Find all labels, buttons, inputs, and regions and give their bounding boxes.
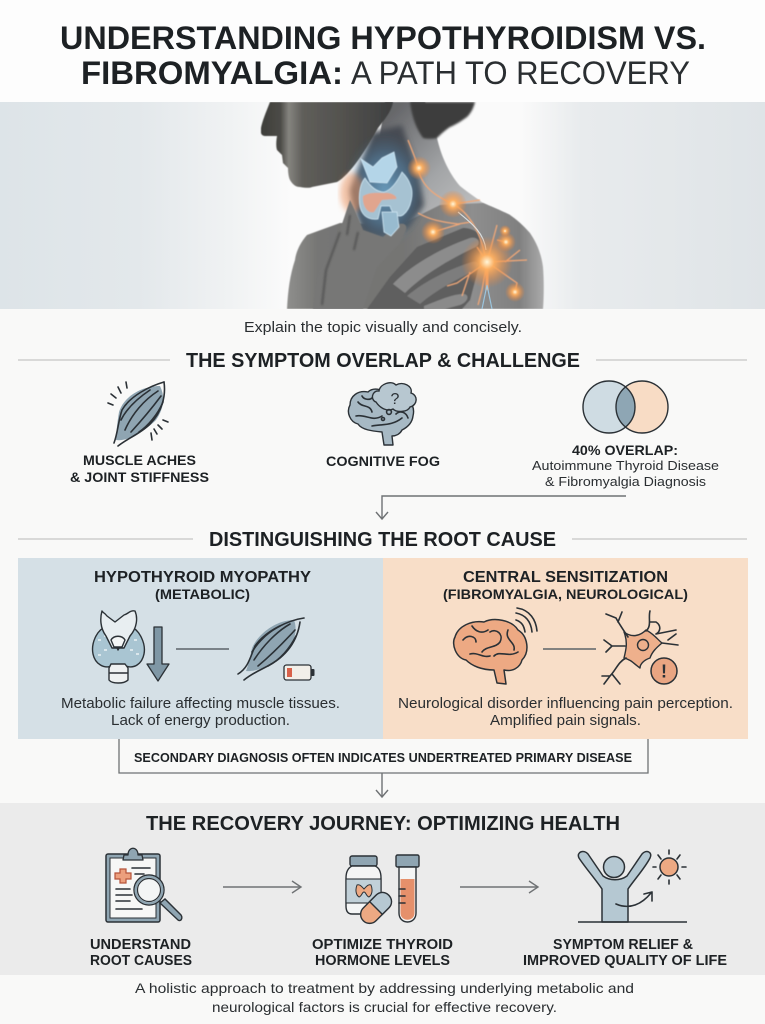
panel: recovery journey [0,803,765,975]
heading: root cause: DISTINGUISHING THE ROOT CAUSE [209,529,556,551]
icon: torso and shoulders [287,203,544,309]
panel: hypothyroid myopathy [18,558,383,739]
symptom: 40% overlap: & Fibromyalgia Diagnosis [545,474,707,489]
icon: muscle with pain marks [108,382,168,446]
label: 40% OVERLAP: [572,442,678,458]
panel text: Lack of energy production. [111,713,290,729]
icon: face [261,102,393,188]
label: UNDERSTAND [90,937,191,953]
icon: venn diagram [583,381,668,433]
callout: secondary diagnosis [119,739,648,773]
step: understand root causes [90,848,192,969]
title: A PATH TO RECOVERY [351,55,690,91]
label: COGNITIVE FOG [326,453,440,469]
title [0,0,765,102]
arrow: step one to two [223,881,301,893]
icon: neck front in shadow [350,125,424,238]
icon: blue nerve lines [458,212,492,309]
step: symptom relief [523,850,727,969]
panel heading: CENTRAL SENSITIZATION [463,569,668,586]
icon: thyroid [359,152,412,236]
symptom: muscle aches [70,382,209,485]
icon: neck back and right shoulder [380,102,510,220]
panel text [61,696,340,729]
symptom: 40% overlap [532,381,719,489]
icon: left hand shading [322,215,358,305]
arrow: step two to three [460,881,538,893]
panel heading [94,569,311,602]
closing text: neurological factors is crucial for effective recovery. [212,999,557,1015]
connector line [543,648,596,650]
icon: brain with signal waves [454,608,537,684]
icon: muscle [238,618,304,680]
arrow: callout to recovery [376,773,388,797]
step: optimize thyroid: HORMONE LEVELS [315,953,450,969]
panel heading: (FIBROMYALGIA, NEUROLOGICAL) [443,586,688,602]
icon: thyroid [93,611,144,683]
icon: hair bun [410,102,475,139]
icon: glowing nodes [407,156,525,302]
icon: down arrow [147,627,169,681]
panel heading: (METABOLIC) [155,586,250,602]
panel heading [443,569,688,602]
symptom: muscle aches: & JOINT STIFFNESS [70,469,209,485]
icon: person with raised arms and sun [578,850,687,922]
arrow: overlap to root cause [376,496,626,519]
label: OPTIMIZE THYROID [312,937,453,953]
icon: left hand at throat [313,200,406,309]
closing text: A holistic approach to treatment by addressing underlying metabolic and [135,980,634,996]
step: symptom relief: IMPROVED QUALITY OF LIFE [523,953,727,969]
icon: brain with question cloud: ? [391,391,400,408]
label: MUSCLE ACHES [83,452,196,468]
icon: clipboard and magnifier [106,848,182,922]
panel text [398,696,733,729]
heading: symptom overlap: THE SYMPTOM OVERLAP & CHALLENGE [186,350,580,372]
panel: central sensitization [383,558,748,739]
intro text: Explain the topic visually and concisely. [244,320,522,336]
icon: right hand fingers [367,228,480,309]
symptom: cognitive fog [326,383,440,469]
symptom: 40% overlap: Autoimmune Thyroid Disease [532,458,719,473]
icon: thyroid glow [349,140,420,236]
heading: recovery journey: THE RECOVERY JOURNEY: OPTIMIZING HEALTH [146,813,620,835]
step: understand root causes: ROOT CAUSES [90,953,192,969]
icon: neuron with warning: ! [661,662,667,682]
icon: neuron with warning [602,611,678,684]
icon: neuron network [408,140,527,305]
step: optimize thyroid [312,855,453,969]
hero illustration: profile with thyroid and neurons [0,102,765,309]
panel text: Metabolic failure affecting muscle tissues. [61,696,340,712]
title: FIBROMYALGIA: [81,55,343,91]
panel text: Amplified pain signals. [490,713,641,729]
icon: pill bottle, capsule, test tube [346,855,419,927]
label: SYMPTOM RELIEF & [553,937,694,953]
title: UNDERSTANDING HYPOTHYROIDISM VS. [60,20,706,56]
closing text [135,980,634,1015]
icon: low battery [284,665,314,680]
panel heading: HYPOTHYROID MYOPATHY [94,569,311,586]
connector line [176,648,229,650]
callout: secondary diagnosis: SECONDARY DIAGNOSIS OFTEN INDICATES UNDERTREATED PRIMARY DISEASE [134,751,632,765]
panel text: Neurological disorder influencing pain perception. [398,696,733,712]
